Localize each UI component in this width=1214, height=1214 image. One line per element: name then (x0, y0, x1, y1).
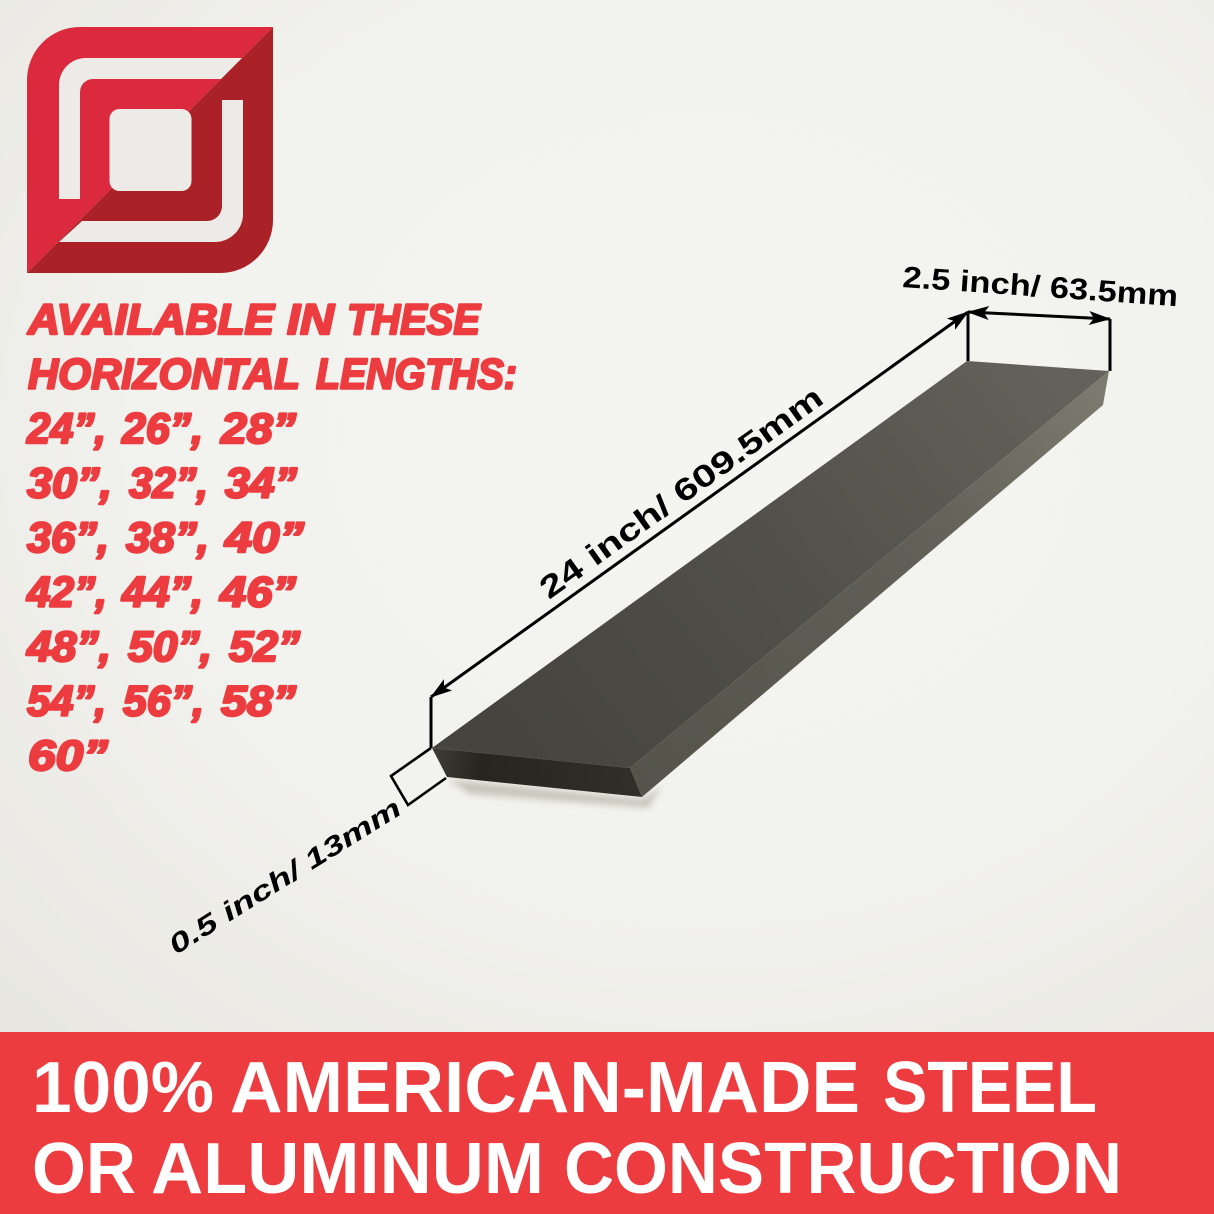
lengths text block (26, 296, 517, 780)
lengths text block: 34” (225, 460, 298, 508)
lengths text block: 48”, (26, 623, 111, 671)
lengths text block: 40” (224, 514, 305, 562)
lengths text block: 38”, (126, 514, 209, 562)
lengths text block: 28” (220, 405, 297, 453)
logo (27, 27, 273, 273)
bottom banner: 100% (32, 1048, 214, 1128)
label: thickness: 0.5 inch/ 13mm (163, 793, 406, 960)
lengths text block: IN (287, 296, 335, 344)
dimension: length arrow (431, 312, 968, 748)
lengths text block: 44”, (121, 568, 203, 616)
lengths text block: THESE (347, 296, 481, 344)
dimension: thickness bracket (391, 748, 446, 805)
lengths text block: 26”, (121, 405, 203, 453)
label: width: 2.5 inch/ 63.5mm (902, 261, 1179, 313)
lengths text block: 60” (28, 732, 109, 780)
label: length: 24 inch/ 609.5mm (533, 379, 830, 606)
lengths text block: AVAILABLE (27, 296, 275, 344)
lengths text block: 52” (229, 623, 300, 671)
bottom banner: CONSTRUCTION (564, 1129, 1122, 1209)
bottom banner: ALUMINUM (151, 1129, 544, 1209)
dimension: width arrow (968, 312, 1110, 371)
lengths text block: HORIZONTAL (28, 350, 300, 398)
lengths text block: 46” (219, 568, 297, 616)
lengths text block: 50”, (128, 623, 212, 671)
bottom banner (0, 1032, 1214, 1214)
lengths text block: LENGTHS: (316, 350, 517, 398)
lengths text block: 32”, (129, 460, 208, 508)
lengths text block: 42”, (26, 568, 107, 616)
lengths text block: 24”, (26, 405, 106, 453)
bottom banner: OR (32, 1129, 136, 1209)
lengths text block: 56”, (123, 678, 204, 726)
lengths text block: 30”, (27, 460, 112, 508)
steel bar (432, 361, 1109, 808)
lengths text block: 58” (221, 678, 297, 726)
bottom banner: STEEL (883, 1048, 1097, 1128)
bottom banner: AMERICAN-MADE (230, 1048, 860, 1128)
lengths text block: 36”, (27, 514, 109, 562)
lengths text block: 54”, (27, 678, 106, 726)
